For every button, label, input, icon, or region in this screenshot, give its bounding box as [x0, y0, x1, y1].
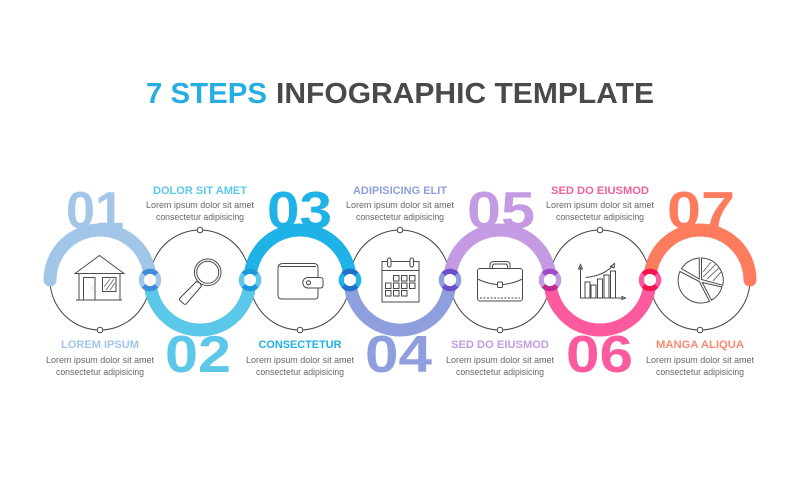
- step numbers: 03: [267, 182, 332, 240]
- connector node 2-3: [241, 271, 259, 289]
- label: step 2: consectetur adipisicing: [156, 212, 244, 223]
- step numbers: [66, 182, 735, 384]
- thick connecting arcs: [44, 230, 756, 330]
- label: step 2: [146, 185, 254, 223]
- label: step 6: [546, 185, 654, 223]
- label: step 3: Lorem ipsum dolor sit amet: [246, 355, 354, 366]
- connector node 3-4: [341, 271, 359, 289]
- icon: briefcase: [478, 262, 522, 301]
- label: step 5: consectetur adipisicing: [456, 367, 544, 378]
- icon: pie chart: [678, 258, 723, 303]
- step numbers: 07: [667, 182, 735, 240]
- step numbers: 04: [365, 326, 432, 384]
- step numbers: 06: [566, 326, 633, 384]
- label: step 6: Lorem ipsum dolor sit amet: [546, 200, 654, 211]
- icon: house: [75, 256, 124, 300]
- step numbers: 05: [467, 182, 535, 240]
- label: step 5: SED DO EIUSMOD: [451, 339, 549, 351]
- icon: wallet: [278, 264, 323, 299]
- connector node 5-6: [541, 271, 559, 289]
- title: INFOGRAPHIC TEMPLATE: [276, 78, 654, 110]
- connector node 6-7: [641, 271, 659, 289]
- label: step 5: Lorem ipsum dolor sit amet: [446, 355, 554, 366]
- label: step 5: [446, 339, 554, 378]
- label: step 3: consectetur adipisicing: [256, 367, 344, 378]
- label: step 4: [346, 185, 454, 223]
- label: step 1: LOREM IPSUM: [61, 339, 139, 351]
- thin outline circles: [50, 227, 750, 333]
- label: step 3: [246, 339, 354, 378]
- label: step 6: SED DO EIUSMOD: [551, 185, 649, 197]
- title: 7 STEPS: [146, 78, 267, 110]
- step numbers: 01: [66, 182, 124, 240]
- label: step 1: Lorem ipsum dolor sit amet: [46, 355, 154, 366]
- label: step 7: [646, 339, 754, 378]
- connector node 1-2: [141, 271, 159, 289]
- step numbers: 02: [165, 326, 231, 384]
- label: step 2: Lorem ipsum dolor sit amet: [146, 200, 254, 211]
- label: step 7: Lorem ipsum dolor sit amet: [646, 355, 754, 366]
- icon: calendar: [382, 258, 419, 302]
- label: step 4: consectetur adipisicing: [356, 212, 444, 223]
- connector node 4-5: [441, 271, 459, 289]
- icon: magnifier: [180, 259, 221, 304]
- label: step 4: Lorem ipsum dolor sit amet: [346, 200, 454, 211]
- label: step 6: consectetur adipisicing: [556, 212, 644, 223]
- label: step 1: [46, 339, 154, 378]
- icon: growth chart: [578, 264, 626, 300]
- label: step 2: DOLOR SIT AMET: [153, 185, 247, 197]
- label: step 1: consectetur adipisicing: [56, 367, 144, 378]
- label: step 4: ADIPISICING ELIT: [353, 185, 447, 197]
- label: step 3: CONSECTETUR: [258, 339, 342, 351]
- label: step 7: consectetur adipisicing: [656, 367, 744, 378]
- label: step 7: MANGA ALIQUA: [656, 339, 744, 351]
